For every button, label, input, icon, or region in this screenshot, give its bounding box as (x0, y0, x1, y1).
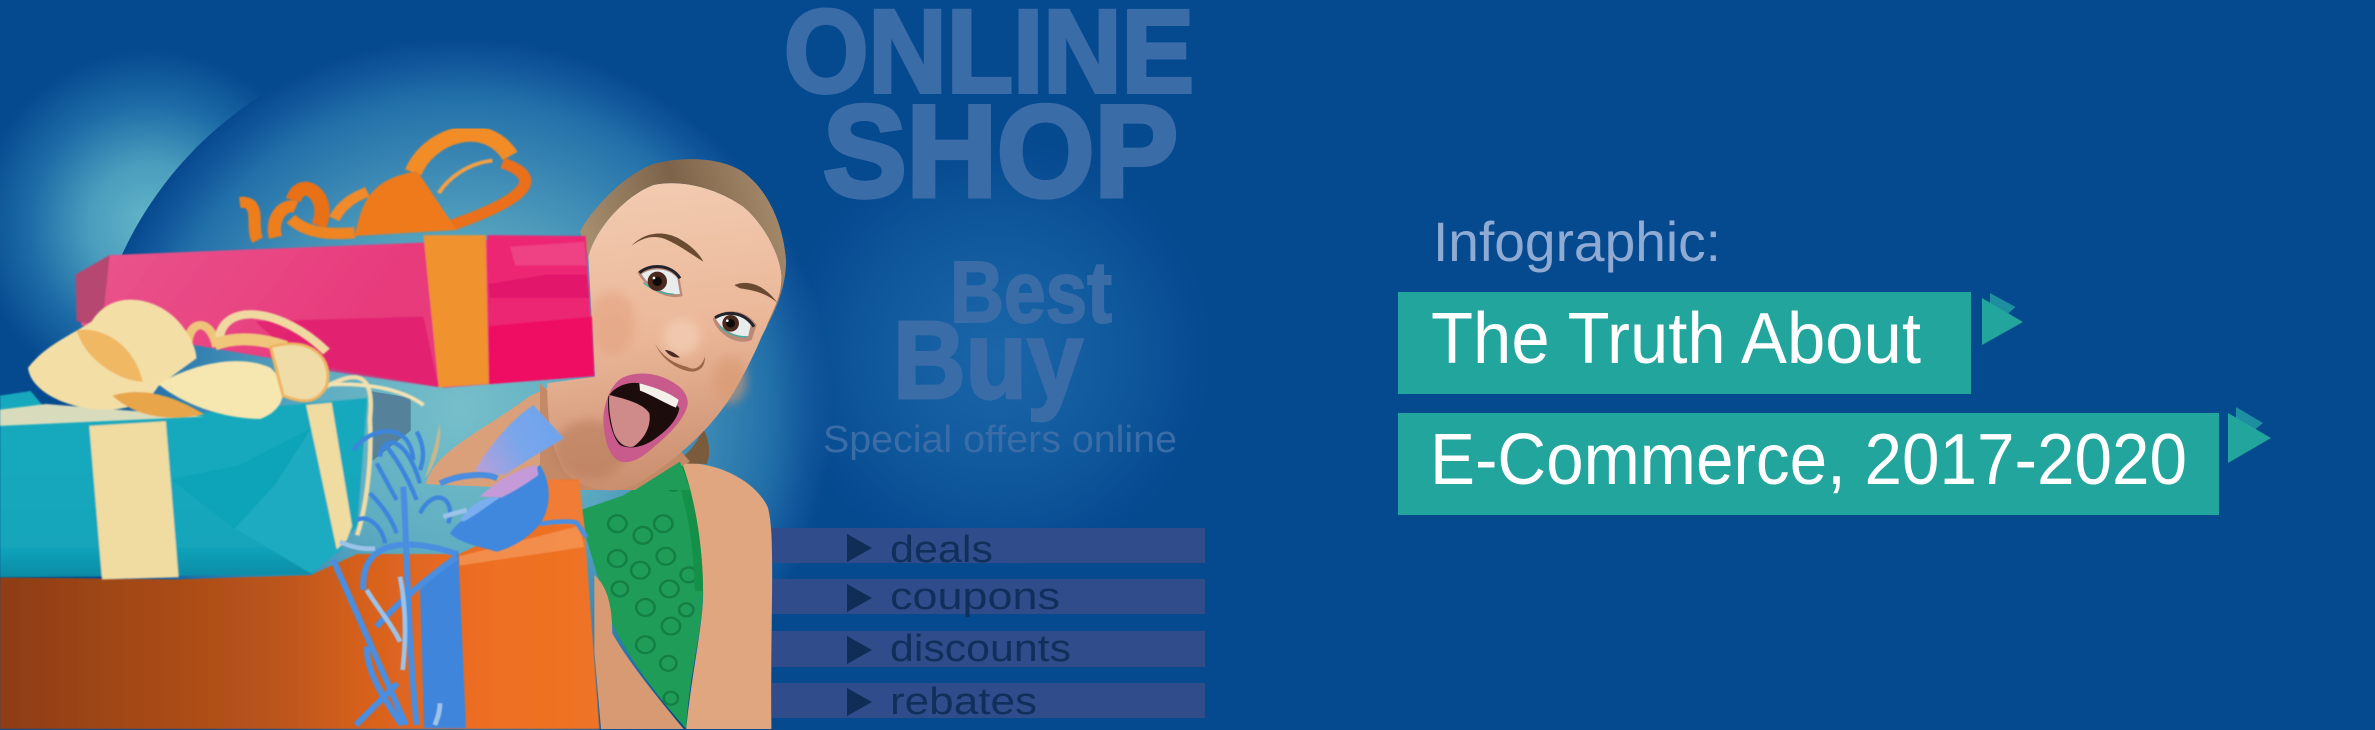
subtitle: infographic: Infographic: (1433, 210, 1721, 273)
offer row: rebates: rebates (890, 681, 1037, 723)
offer list (772, 528, 1205, 723)
offer row: deals: deals (890, 529, 993, 571)
best buy heading: Buy (893, 299, 1083, 422)
special offers line: Special offers online (823, 419, 1177, 461)
offer row: rebates (772, 683, 1205, 718)
title bar: e-commerce: E-Commerce, 2017-2020 (1430, 420, 2187, 500)
offer row: deals (772, 528, 1205, 563)
orange gift top (542, 480, 584, 526)
orange bow (240, 134, 525, 240)
offer row: discounts (772, 631, 1205, 667)
orange gift (0, 479, 599, 729)
cream bow (0, 300, 423, 535)
ribbon main loop (450, 465, 549, 552)
offer row: discounts: discounts (890, 628, 1071, 670)
online shop heading (786, 8, 1192, 200)
offer row: coupons: coupons (890, 576, 1060, 618)
background glow: best buy (832, 188, 1163, 520)
right eye (713, 311, 757, 342)
ribbon upper loop (475, 405, 564, 475)
right eyebrow (734, 283, 777, 303)
ribbon feather (425, 423, 440, 478)
green dress (582, 461, 703, 729)
background glow: behind woman (88, 38, 832, 730)
ribbon strap (420, 550, 466, 728)
pink gift dark lower area (255, 317, 439, 387)
background glow: top left (0, 63, 253, 348)
green dress collar (635, 462, 690, 490)
pink gift right side (487, 235, 594, 384)
grey box (370, 391, 411, 461)
neck (540, 383, 690, 490)
teal gift strap (89, 421, 179, 580)
gifts (0, 134, 684, 729)
pink gift end (76, 255, 110, 326)
left eyebrow (632, 233, 703, 262)
woman head (540, 159, 786, 490)
title bar: the truth about: The Truth About (1431, 299, 1921, 379)
pink gift strap (423, 235, 489, 387)
hair bun (684, 430, 710, 464)
pink gift (76, 235, 594, 388)
right arm (681, 463, 772, 729)
best buy heading: Best (950, 244, 1112, 341)
ribbon curls (333, 475, 497, 725)
nose (655, 318, 705, 372)
woman body (426, 386, 772, 729)
left shoulder (426, 388, 548, 487)
face (547, 183, 782, 490)
mouth (603, 374, 688, 462)
orange gift highlight (459, 526, 584, 566)
blue ribbon (333, 405, 587, 728)
arrow: first title bar (1982, 293, 2023, 345)
teal gift (0, 391, 367, 580)
ribbon pale strands (340, 510, 467, 725)
online shop heading: SHOP (823, 78, 1178, 224)
hand (594, 575, 684, 729)
left eye (637, 265, 683, 297)
arrow: second title bar (2228, 407, 2271, 463)
offer row: coupons (772, 576, 1205, 618)
teal gift fold (235, 428, 343, 573)
hair (580, 159, 786, 327)
cheek shading (588, 292, 635, 355)
ribbon side strap (540, 522, 587, 537)
